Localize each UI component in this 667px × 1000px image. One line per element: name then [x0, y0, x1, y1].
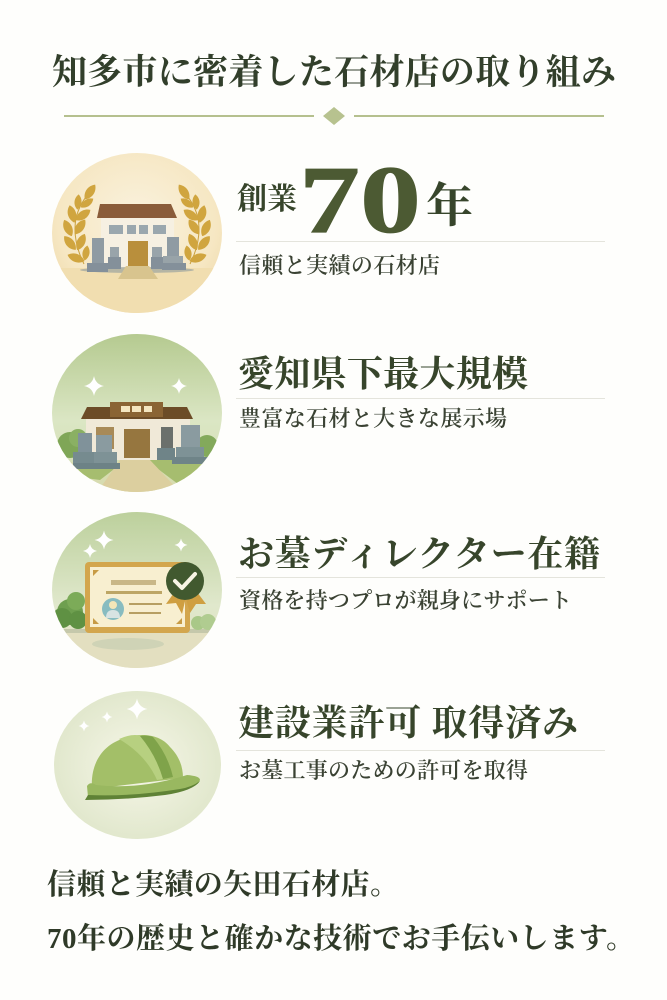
heading: 創業70年: 年: [426, 169, 473, 236]
heading: 創業70年: 70: [299, 146, 421, 253]
icon: hard hat: [54, 691, 221, 839]
closing text: 信頼と実績の矢田石材店。: [47, 868, 399, 901]
closing text: 70年の歴史と確かな技術でお手伝いします。: [47, 922, 635, 955]
closing text: [47, 868, 635, 955]
subtext: 信頼と実績の石材店: [239, 249, 440, 280]
icon: large showroom: [50, 334, 222, 495]
title: 知多市に密着した石材店の取り組み: [52, 45, 616, 95]
subtext: 資格を持つプロが親身にサポート: [239, 584, 572, 615]
panel: largest in Aichi: [50, 334, 605, 495]
heading: お墓ディレクター在籍: [238, 526, 600, 577]
title divider: [64, 107, 604, 125]
heading: 建設業許可 取得済み: [238, 695, 578, 746]
icon: certificate: [50, 512, 224, 670]
heading: 創業70年: [237, 146, 473, 253]
heading: 創業70年: 創業: [237, 174, 297, 218]
panel: construction permit: [54, 691, 605, 839]
subtext: 豊富な石材と大きな展示場: [239, 402, 507, 433]
panel: founded 70 years: [50, 146, 605, 316]
panel: grave director: [50, 512, 605, 670]
heading: 愛知県下最大規模: [238, 346, 528, 397]
subtext: お墓工事のための許可を取得: [239, 754, 528, 785]
icon: shop with laurel wreath: [50, 153, 225, 316]
